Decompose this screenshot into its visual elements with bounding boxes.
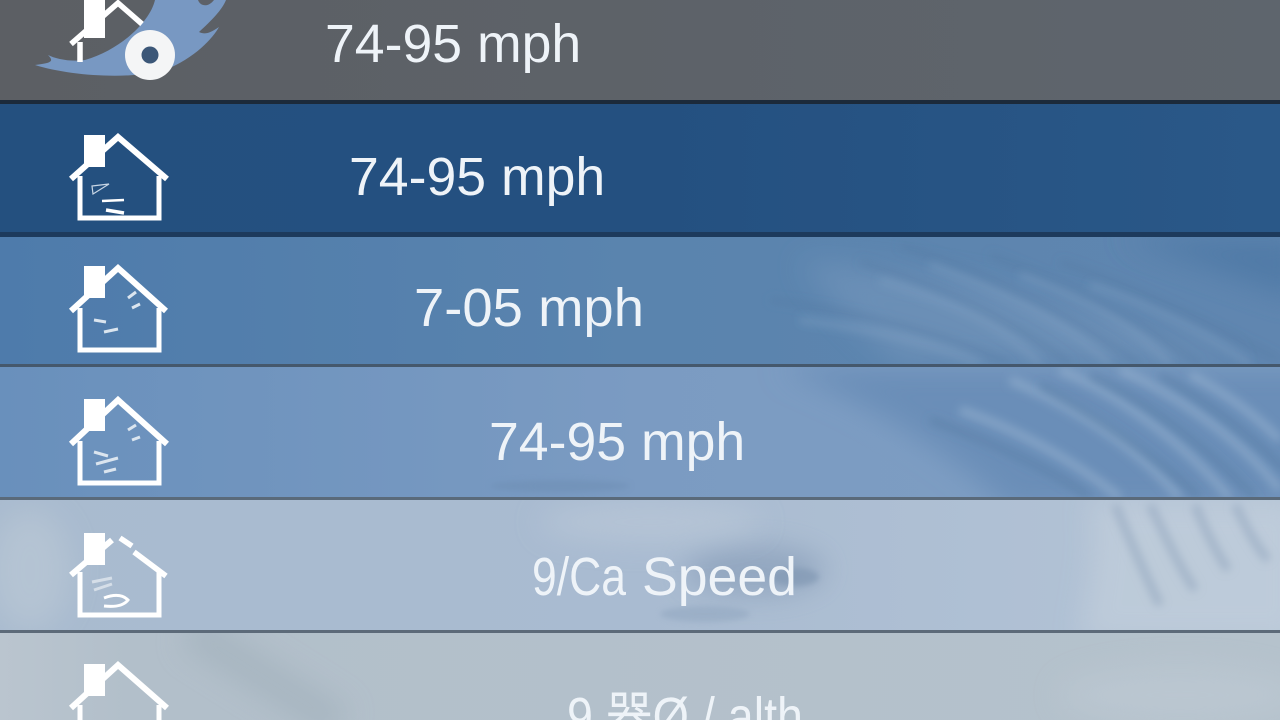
swirl clouds row 4 bbox=[816, 367, 1280, 497]
icon: damaged house, row 5 bbox=[71, 533, 166, 615]
speed label row 3: 7-05 mph bbox=[414, 278, 644, 338]
icon: house with tornado swirl bbox=[35, 0, 226, 80]
icon: house with debris, row 3 bbox=[71, 266, 166, 350]
speed label row 4: 74-95 mph bbox=[489, 412, 745, 472]
cloud ridges row 3 bbox=[770, 237, 1280, 364]
band 4: lighter blue row with central swirl bbox=[0, 367, 1280, 510]
icon: house, row 6 bbox=[71, 664, 167, 720]
band 3: mid blue row with cloud ridges bbox=[0, 237, 1280, 367]
faint clouds row 6 bbox=[130, 634, 329, 719]
speed label row 2: 74-95 mph bbox=[349, 147, 605, 207]
icon: house with debris, row 2 bbox=[71, 135, 167, 218]
speed label row 5: 9/Ca bbox=[532, 547, 626, 607]
speed label row 5: Speed bbox=[642, 547, 797, 607]
band 6: pale gray row, cut off at bottom bbox=[0, 630, 1280, 720]
band 5: pale row with hurricane eye bbox=[0, 500, 1280, 640]
hurricane eye clouds row 5 bbox=[0, 506, 1280, 630]
speed label row 1: 74-95 mph bbox=[325, 14, 581, 74]
icon: house with debris, row 4 bbox=[71, 399, 167, 483]
band 2: dark blue row bbox=[0, 104, 1280, 237]
band 1: gray row bbox=[0, 0, 1280, 104]
